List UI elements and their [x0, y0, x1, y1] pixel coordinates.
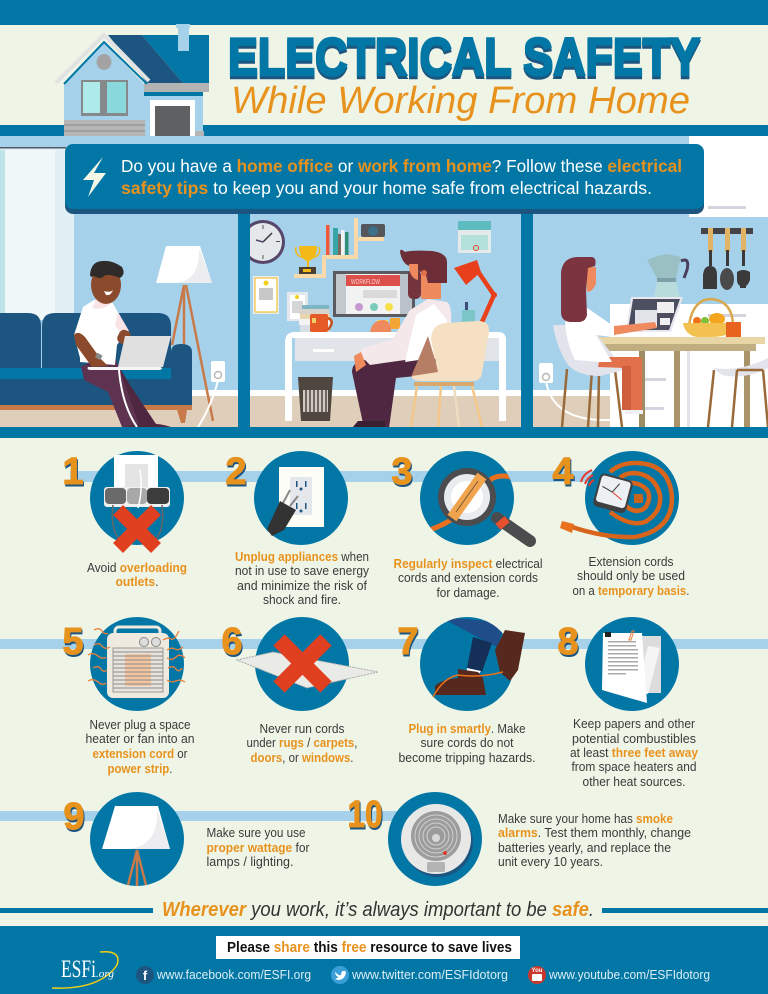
- tip 8: other heat sources.: [582, 775, 686, 789]
- tip 2: 2: [225, 451, 247, 493]
- tip 9: lamps / lighting.: [206, 855, 294, 869]
- tip 10: unit every 10 years.: [498, 855, 603, 869]
- tip 4: 4: [553, 453, 575, 495]
- tip 4: [552, 451, 690, 598]
- tip 1: 1: [63, 453, 85, 495]
- sticky notes: [377, 318, 400, 329]
- intro text: [121, 156, 682, 198]
- tip 4: Extension cords: [588, 555, 674, 569]
- book stack: [299, 305, 330, 332]
- tip 5: 5: [62, 621, 84, 663]
- tip 2: [225, 451, 370, 607]
- intro text: safety tips to keep you and your home safe from electrical hazards.: [121, 178, 652, 198]
- youtube link: You: [532, 968, 543, 974]
- trophy: [296, 246, 320, 274]
- subtitle: While Working From Home: [231, 80, 690, 122]
- logo: ESFi.org: [52, 952, 118, 988]
- upper cabinet: [689, 136, 768, 217]
- illustration: house: [56, 24, 209, 136]
- tip 7: sure cords do not: [420, 736, 514, 750]
- closing statement: Wherever you work, it’s always important to be safe.: [162, 899, 594, 921]
- tip 9: proper wattage for: [206, 841, 310, 855]
- share box: Please share this free resource to save lives: [227, 939, 512, 956]
- facebook link: [136, 966, 311, 984]
- office chair: [411, 321, 489, 427]
- tip 7: [397, 617, 536, 765]
- shelves: [294, 218, 384, 278]
- tip 3: 3: [392, 453, 414, 495]
- tip 5: power strip.: [108, 762, 172, 776]
- tip 7: 7: [398, 623, 420, 665]
- monitor: [333, 271, 415, 317]
- moka pot: [647, 254, 688, 297]
- certificates: [253, 276, 308, 321]
- wall strip behind banner: [238, 136, 533, 214]
- tip 2: not in use to save energy: [235, 564, 370, 578]
- tip 6: Never run cords: [260, 722, 344, 736]
- tip 8: from space heaters and: [572, 760, 697, 774]
- tip 2: 2: [226, 453, 248, 495]
- tip 10: batteries yearly, and replace the: [498, 841, 671, 855]
- table: [592, 337, 765, 427]
- scene dividers: [0, 214, 768, 438]
- tip 3: cords and extension cords: [398, 571, 538, 585]
- tip 5: [62, 617, 195, 776]
- lower cabinets: [610, 304, 768, 428]
- camera: [361, 224, 385, 237]
- tip 3: [391, 451, 542, 600]
- tip 7: become tripping hazards.: [398, 751, 536, 765]
- icon: lightning bolt: [83, 157, 106, 197]
- tip 5: extension cord or: [92, 747, 188, 761]
- wall clock: [250, 220, 285, 264]
- monitor: WORKFLOW: [351, 277, 381, 286]
- desk lamp: [454, 260, 497, 322]
- tip 5: Never plug a space: [90, 718, 191, 732]
- tip 6: 6: [222, 623, 244, 665]
- curtain: [0, 147, 74, 320]
- floor lamp: [156, 246, 213, 421]
- tablet: [626, 297, 683, 332]
- twitter link: [331, 966, 508, 984]
- tip 7: Plug in smartly. Make: [408, 722, 526, 736]
- tip 10: 10: [348, 794, 382, 836]
- tip 3: for damage.: [436, 586, 500, 600]
- sofa: [0, 313, 192, 423]
- desk: [285, 332, 506, 421]
- tip 9: Make sure you use: [206, 826, 306, 840]
- outlet and cord: [539, 363, 616, 420]
- facebook link: www.facebook.com/ESFI.org: [156, 968, 311, 982]
- tip 4: on a temporary basis.: [572, 584, 690, 598]
- man at desk: [352, 250, 451, 428]
- right chair: [713, 358, 768, 376]
- connector bars: [0, 471, 768, 821]
- fruit basket: [683, 299, 741, 337]
- tip 9: 9: [63, 796, 85, 838]
- outlet and cord: [198, 361, 225, 427]
- tip 9: 9: [64, 798, 86, 840]
- tip 10: [348, 792, 691, 886]
- scene: home office: [241, 136, 521, 428]
- tip 2: Unplug appliances when: [235, 550, 369, 564]
- youtube link: www.youtube.com/ESFIdotorg: [548, 968, 710, 982]
- share box: [216, 936, 520, 959]
- tip 2: shock and fire.: [263, 593, 341, 607]
- intro text: Do you have a home office or work from home? Follow these electrical: [121, 156, 682, 176]
- logo: ESFi.org: ESFi: [61, 956, 96, 983]
- hanging utensils: [701, 228, 753, 290]
- mug: [310, 314, 332, 332]
- facebook link: f: [143, 968, 148, 983]
- tip 10: Make sure your home has smoke: [498, 812, 673, 826]
- wall calendar: [458, 221, 491, 253]
- tip 4: should only be used: [577, 569, 685, 583]
- tip 1: [62, 451, 187, 589]
- tip 6: doors, or windows.: [250, 751, 354, 765]
- tip 1: Avoid overloading: [87, 561, 187, 575]
- tip 7: 7: [397, 621, 419, 663]
- tip 10: alarms. Test them monthly, change: [498, 826, 691, 840]
- youtube link: [528, 966, 710, 984]
- tip 10: 10: [348, 796, 384, 838]
- tip 8: Keep papers and other: [573, 717, 695, 731]
- closing line rules: [0, 908, 768, 913]
- tip 9: [63, 792, 310, 886]
- tip 8: 8: [558, 623, 580, 665]
- tip 8: [557, 617, 698, 789]
- tip 5: 5: [63, 623, 85, 665]
- scene: kitchen: [533, 136, 768, 428]
- tip 6: under rugs / carpets,: [246, 736, 358, 750]
- tip 6: 6: [221, 621, 243, 663]
- tip 6: [221, 617, 378, 765]
- tip 5: heater or fan into an: [86, 732, 195, 746]
- footer: [0, 926, 768, 994]
- header band: [0, 125, 768, 136]
- trash can: [298, 377, 333, 421]
- tip 2: and minimize the risk of: [237, 579, 368, 593]
- stools: [562, 369, 768, 427]
- logo: ESFi.org: .org: [96, 968, 115, 980]
- man on sofa: [74, 261, 171, 427]
- tip 3: 3: [391, 451, 413, 493]
- tip 1: outlets.: [116, 575, 158, 589]
- tip 3: Regularly inspect electrical: [394, 557, 542, 571]
- books on shelf: [326, 225, 348, 255]
- tip 1: 1: [62, 451, 84, 493]
- scene: living room: [0, 136, 238, 428]
- tip 8: 8: [557, 621, 579, 663]
- tip 4: 4: [552, 451, 574, 493]
- twitter link: www.twitter.com/ESFIdotorg: [351, 968, 508, 982]
- intro banner: [65, 144, 704, 214]
- woman at table: [553, 257, 657, 414]
- tip 8: at least three feet away: [570, 746, 698, 760]
- tip 8: potential combustibles: [572, 732, 696, 746]
- top band: [0, 0, 768, 25]
- pen cup: [462, 302, 475, 322]
